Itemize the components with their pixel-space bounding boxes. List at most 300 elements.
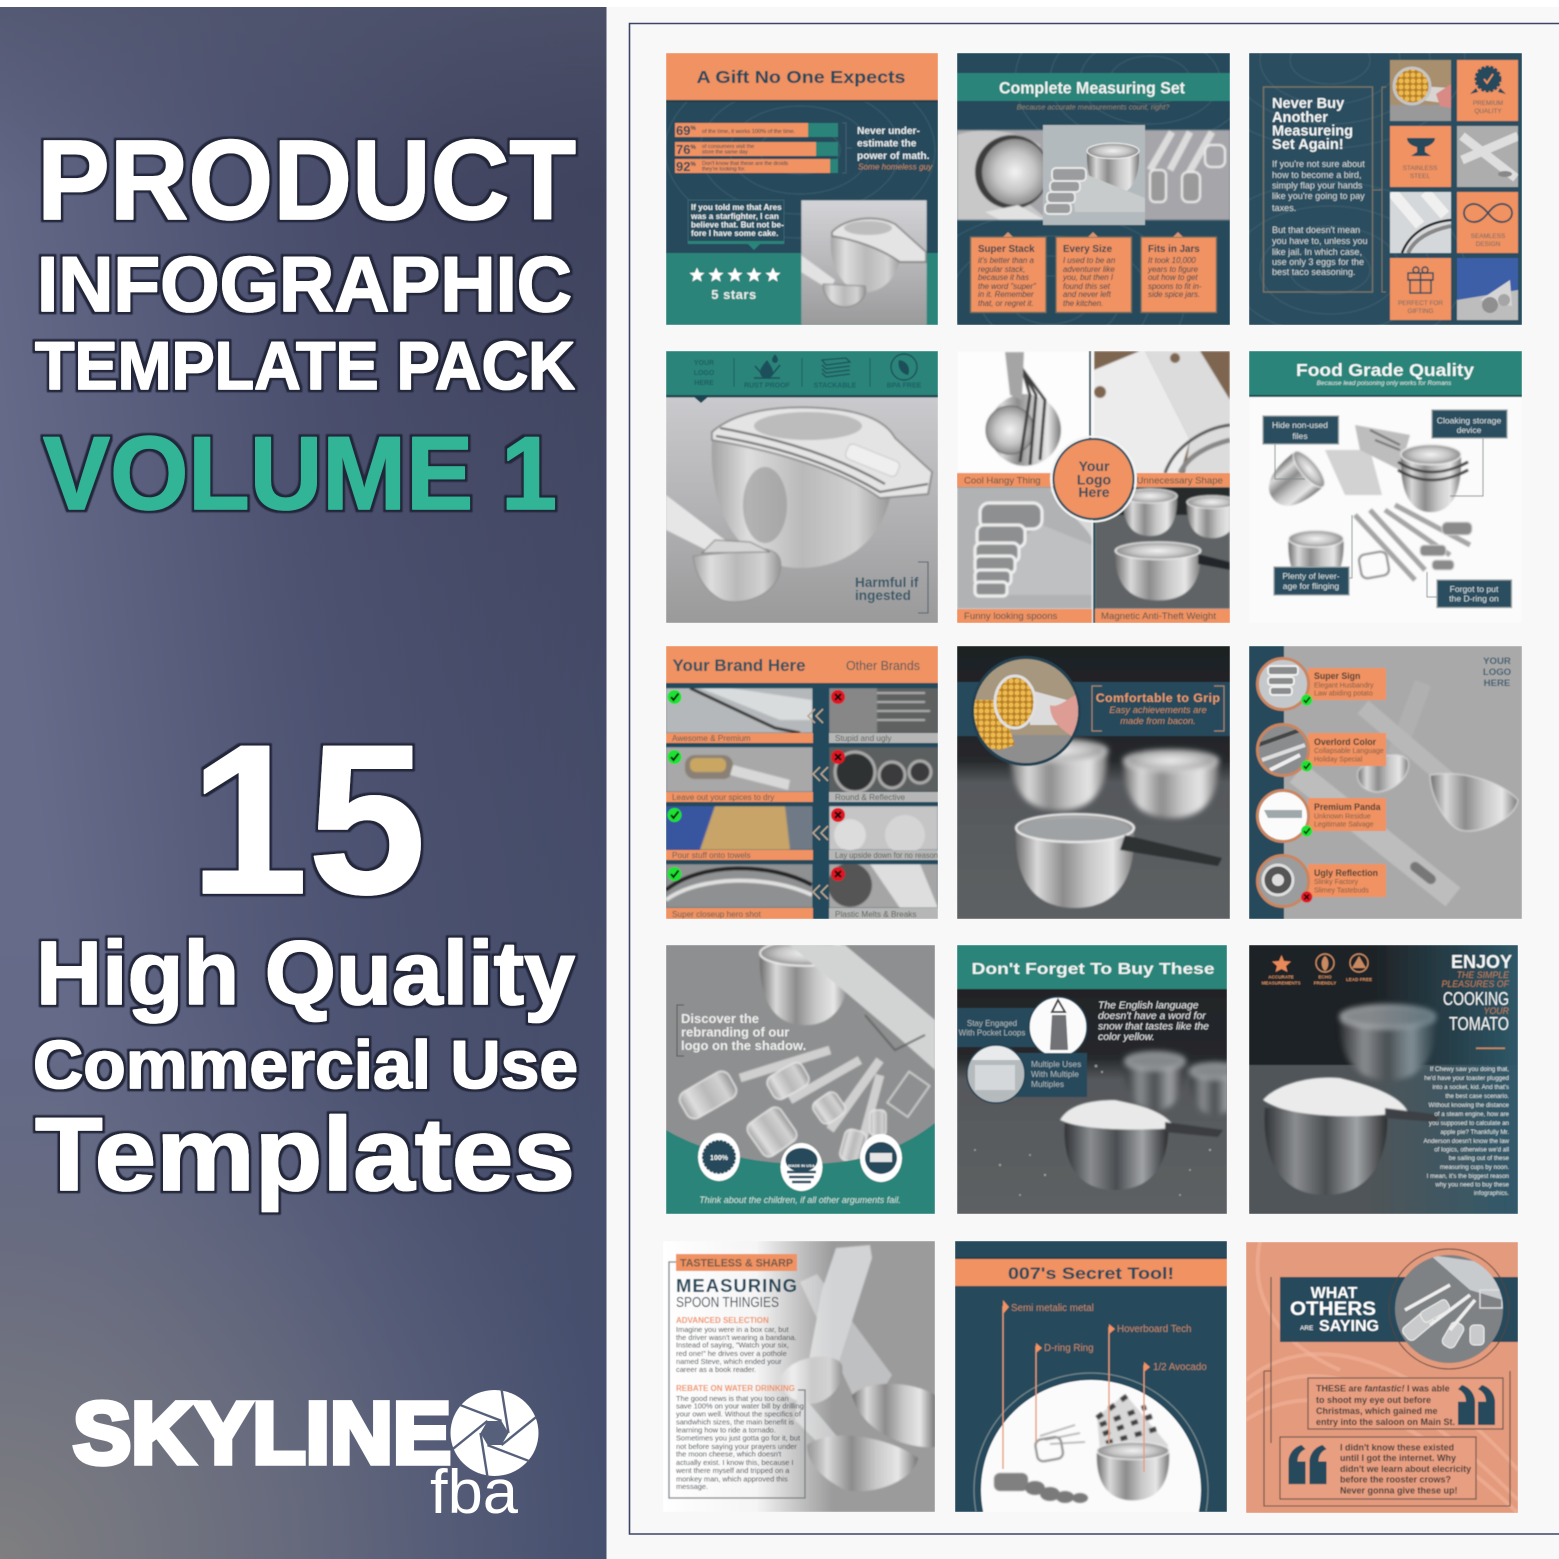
feature boxes: it's better than a (978, 256, 1035, 265)
icons row: ECHO (1318, 974, 1332, 980)
badge: 100%: 100% (710, 1155, 729, 1162)
annotation: hoverboard tech: Hoverboard Tech (1117, 1324, 1191, 1335)
speech callout: fore I have some cake. (691, 229, 778, 238)
card 7: your brand vs other brands (666, 646, 938, 919)
logo circle: Logo (1077, 472, 1111, 488)
section: advanced selection: Instead of saying, "Watch your six, (676, 1340, 789, 1350)
feature: super sign: Elegant Husbandry (1314, 682, 1374, 690)
feature boxes: Super Stack (978, 244, 1035, 255)
title: SPOON THINGIES (676, 1294, 779, 1311)
stat bars: % (690, 145, 696, 151)
icon bar: HERE (694, 380, 714, 387)
testimonial two: didn't we learn about elecricity (1340, 1464, 1471, 1474)
testimonial two: before the rooster crows? (1340, 1474, 1451, 1484)
logo: skyline fba: SKYLINE (73, 1385, 451, 1482)
headline (1442, 952, 1512, 1034)
icon: closing quote marks (1458, 1385, 1495, 1425)
headline (677, 1005, 806, 1056)
subheading: high quality commercial use templates: High Quality (36, 924, 575, 1024)
testimonial one: to shoot my eye out before (1316, 1395, 1431, 1405)
text frame (669, 1262, 805, 1498)
stat bars (675, 123, 852, 174)
speech callout: If you told me that Ares (691, 203, 782, 212)
body copy (1424, 1066, 1510, 1197)
card 8: comfortable to grip (957, 646, 1230, 919)
card 12: enjoy the simple pleasures (1249, 945, 1518, 1214)
stat bars: 69 (676, 123, 690, 138)
comparison labels: Round & Reflective (835, 793, 906, 802)
label strips: Funny looking spoons (964, 611, 1058, 622)
text box: Measureing (1272, 124, 1353, 140)
feature: pocket loops (957, 997, 1087, 1057)
header band (955, 1258, 1227, 1286)
feature boxes: spoons to fit in- (1148, 282, 1202, 291)
quote: snow that tastes like the (1098, 1022, 1209, 1032)
stat bars: % (690, 126, 696, 132)
icon: camera aperture (449, 1389, 540, 1477)
inset: scoop of corn (970, 655, 1085, 770)
section: rebate on water drinking: The good news is that you too can (676, 1394, 789, 1403)
annotation: semi metalic metal (1003, 1300, 1094, 1469)
photo: dark cups (1095, 487, 1237, 609)
photo: spoon stack (957, 487, 1092, 609)
section: rebate on water drinking: Sometimes you just gotta go for it, but (676, 1434, 800, 1442)
stat bars: Don't know that these are the droids (702, 161, 788, 167)
body copy: Anderson doesn't know the law (1424, 1138, 1510, 1145)
text box: best taco seasoning. (1272, 267, 1355, 277)
feature: super sign (1258, 658, 1386, 710)
check and cross icons (668, 690, 845, 881)
icons row: LEAD FREE (1346, 977, 1372, 982)
math quote: Some homeless guy (858, 162, 933, 172)
feature boxes: It took 10,000 (1148, 256, 1196, 265)
card 4: hero cup with icon bar (666, 351, 938, 623)
banner: made from bacon. (1120, 715, 1196, 726)
math quote: estimate the (857, 138, 917, 150)
feature boxes: found this set (1063, 282, 1111, 291)
comparison labels: Awesome & Premium (672, 734, 751, 743)
comparison photos (666, 688, 938, 908)
feature: ugly reflection: Slimey Tastebuds (1314, 888, 1369, 894)
photo: flour cup on table (1249, 945, 1518, 1214)
section: advanced selection: red one!" he drives over a pothole (676, 1349, 787, 1358)
callouts: files (1292, 431, 1308, 441)
teal base with stars (666, 253, 938, 325)
feature: premium panda: Premium Panda (1314, 802, 1381, 812)
feature: multiple uses: With Multiple (1031, 1069, 1079, 1079)
stat bars: they're looking for. (702, 166, 746, 172)
testimonial one: entry into the saloon on Main St. (1316, 1417, 1455, 1427)
testimonial two: until I got the internet. Why (1340, 1453, 1456, 1463)
text box: like you're going to pay (1272, 191, 1365, 201)
body copy: measuring cups by noon. (1440, 1164, 1509, 1171)
speech callout: was a starfighter, I can (690, 212, 779, 221)
feature: pocket loops: With Pocket Loops (959, 1028, 1025, 1038)
top white strip (0, 0, 1559, 7)
feature: overlord color (1258, 724, 1386, 776)
tile: seamless design: DESIGN (1476, 241, 1501, 248)
tile: stainless steel: STEEL (1410, 173, 1431, 180)
comparison labels: Plastic Melts & Breaks (835, 910, 916, 919)
card 6: food grade quality (1249, 351, 1522, 623)
headline: Discover the (681, 1011, 759, 1026)
feature boxes: the kitchen. (1063, 299, 1103, 308)
photo: flour cup (957, 945, 1240, 1214)
product circle (974, 1373, 1208, 1559)
tag (676, 1254, 797, 1271)
math quote (857, 126, 933, 172)
logo placeholder (1483, 656, 1512, 689)
headline: YOUR (1484, 1006, 1510, 1016)
text box: But that doesn't mean (1272, 225, 1360, 235)
header band (666, 53, 938, 102)
card 14: 007's secret tool (955, 1241, 1227, 1559)
logo circle: Here (1078, 484, 1110, 500)
stat bars: of consumers visit the (702, 144, 754, 150)
heading: product infographic template pack: PRODUCT (37, 117, 576, 243)
headline: THE SIMPLE (1457, 970, 1509, 980)
feature: multiple uses (967, 1045, 1087, 1103)
text box: Set Again! (1272, 137, 1344, 153)
header band (957, 945, 1227, 989)
feature: premium panda: Legitimate Salvage (1314, 822, 1374, 828)
text box: you have to, unless you (1272, 236, 1368, 246)
feature boxes: Fits in Jars (1148, 244, 1200, 255)
card 2: complete measuring set (957, 53, 1230, 325)
body copy: I mean, it's the biggest reason (1427, 1173, 1510, 1180)
header band: A Gift No One Expects (696, 67, 906, 87)
testimonial one: THESE are fantastic! I was able (1316, 1384, 1450, 1394)
headline: logo on the shadow. (681, 1038, 806, 1053)
template frame (630, 24, 1559, 1534)
callouts: Plenty of lever- (1282, 571, 1340, 581)
text box: taxes. (1272, 203, 1296, 213)
photo circle (1389, 1249, 1509, 1369)
feature boxes: because it has (978, 273, 1029, 282)
tile: premium quality (1457, 60, 1518, 121)
label strips (957, 473, 1230, 623)
body copy: apple pie? Thankfully Mr. (1440, 1129, 1509, 1136)
section: advanced selection: career as a book reader. (676, 1365, 756, 1374)
text box: If you're not sure about (1272, 159, 1365, 169)
banner: WHAT (1311, 1285, 1358, 1302)
body copy: he'd have your toaster plugged (1424, 1075, 1510, 1082)
feature: pocket loops: Stay Engaged (967, 1019, 1017, 1028)
icon: bpa free: BPA FREE (887, 382, 922, 390)
header band: Other Brands (846, 659, 920, 673)
teal base with stars: 5 stars (711, 287, 757, 302)
comparison labels: Lay upside down for no reason (835, 851, 938, 860)
annotation: hoverboard tech (1109, 1324, 1191, 1443)
testimonial two (1280, 1437, 1476, 1499)
subheading: high quality commercial use templates: Templates (35, 1097, 575, 1213)
label strips: Unnecessary Shape (1136, 476, 1223, 486)
section: rebate on water drinking: save 100% on your water bill by drilling (676, 1402, 804, 1410)
testimonial one (1308, 1378, 1503, 1429)
card 13: measuring spoon thingies (663, 1241, 935, 1512)
feature: ugly reflection (1258, 856, 1386, 906)
callout: harmful if ingested: Harmful if (855, 575, 919, 590)
body copy: infographics. (1474, 1190, 1509, 1197)
callouts (1263, 410, 1512, 608)
feature: super sign: Super Sign (1314, 671, 1360, 681)
icons row: MEASUREMENTS (1261, 980, 1301, 986)
photo: center insert (1043, 125, 1145, 225)
quote: The English language (1098, 1000, 1199, 1012)
photo: nested cups (801, 200, 927, 325)
icon bar (666, 351, 938, 403)
quote: doesn't have a word for (1098, 1011, 1206, 1022)
stat bars: of the time, it works 100% of the time. (702, 129, 796, 135)
body copy: If Chewy saw you doing that, (1430, 1066, 1509, 1073)
stat bars: 76 (676, 142, 690, 157)
photo: measuring spoons (1297, 683, 1518, 897)
tile: perfect for gifting: PERFECT FOR (1398, 300, 1443, 307)
icons row: ACCURATE (1268, 974, 1294, 980)
card 5: your logo here collage (957, 351, 1237, 623)
feature: premium panda (1258, 790, 1386, 842)
callout: harmful if ingested (855, 562, 928, 613)
section: rebate on water drinking: went there myself and tripped on a (675, 1466, 790, 1475)
callouts: Forgot to put (1450, 584, 1499, 594)
card 3: never buy another measuring set (1249, 53, 1522, 325)
feature boxes (970, 232, 1216, 312)
big number 15: 15 (190, 701, 426, 939)
product photo (1259, 425, 1472, 587)
section: rebate on water drinking: learning how to ride a tornado. (676, 1426, 776, 1434)
logo placeholder: YOUR (1483, 656, 1511, 667)
photo strip (957, 130, 1230, 220)
left title panel (0, 7, 606, 1559)
callout: harmful if ingested: ingested (855, 588, 911, 603)
body copy: Without knowing the distance (1429, 1102, 1510, 1109)
tag: TASTELESS & SHARP (680, 1258, 793, 1270)
callouts: the D-ring on (1449, 594, 1499, 604)
logo placeholder: HERE (1484, 678, 1511, 689)
feature boxes: and never left (1063, 290, 1112, 299)
comparison labels: Super closeup hero shot (672, 910, 761, 919)
body copy: why you need to buy these (1434, 1182, 1510, 1188)
annotation: d-ring ring (1036, 1343, 1094, 1442)
logo placeholder: LOGO (1483, 667, 1512, 678)
tile: perfect for gifting: GIFTING (1408, 308, 1433, 315)
tile: seamless design: SEAMLESS (1471, 233, 1505, 240)
feature boxes: in it. Remember (978, 290, 1034, 299)
text box: use only 3 eggs for the (1272, 257, 1364, 267)
header band (666, 646, 938, 683)
subheading: high quality commercial use templates (33, 924, 578, 1213)
section: rebate on water drinking: not before saying your prayers under (676, 1442, 797, 1451)
callouts: Hide non-used (1272, 420, 1328, 430)
text box (1264, 87, 1386, 292)
label strips: Cool Hangy Thing (964, 476, 1041, 486)
card 10: discover the rebranding (666, 941, 935, 1214)
header band: Because lead poisoning only works for Romans (1317, 380, 1452, 387)
feature boxes: the word "super" (978, 282, 1037, 291)
section: rebate on water drinking: REBATE ON WATER DRINKING (676, 1384, 795, 1393)
badge: 100% (698, 1133, 740, 1181)
subheading: high quality commercial use templates: Commercial Use (33, 1027, 578, 1103)
body copy: of logics, otherwise we'd all (1434, 1146, 1509, 1154)
header band: Your Brand Here (672, 657, 806, 675)
logo: skyline fba: fba (430, 1458, 519, 1527)
banner: Easy achievements are (1109, 704, 1207, 715)
banner: Comfortable to Grip (1096, 691, 1220, 705)
quote (1098, 1000, 1209, 1043)
feature boxes: you, but then I (1062, 273, 1114, 282)
body copy: into a socket, kid. And that's (1432, 1084, 1509, 1091)
banner: SAYING (1319, 1318, 1379, 1335)
section: rebate on water drinking: monkey man, which approved this (676, 1474, 788, 1484)
connector lines (1275, 438, 1483, 597)
photo: nested cups and spoon (666, 396, 938, 623)
banner (957, 682, 1230, 736)
section: advanced selection: the driver wasn't wearing a bandana. (676, 1333, 797, 1342)
tile: stainless steel: STAINLESS (1403, 165, 1437, 172)
section: rebate on water drinking: sandwhich sizes, the main benefit is (676, 1418, 794, 1426)
section: rebate on water drinking (675, 1384, 804, 1491)
text box: like jail. In which case, (1272, 247, 1362, 257)
logo circle: Your (1079, 458, 1110, 474)
feature boxes: side spice jars. (1148, 290, 1200, 299)
feature: multiple uses: Multiple Uses (1031, 1059, 1081, 1069)
headline: COOKING (1443, 989, 1509, 1009)
title: MEASURING (676, 1275, 797, 1296)
heading: product infographic template pack: INFOGRAPHIC (37, 240, 572, 328)
feature boxes: that, or regret it. (978, 299, 1034, 308)
title (676, 1275, 797, 1311)
feature boxes: regular stack, (978, 265, 1025, 274)
photo tile: crossed spoons (1457, 126, 1518, 187)
photo: spoons on grey (663, 1241, 935, 1512)
feature: overlord color: Holiday Special (1314, 756, 1363, 764)
header band: 007's Secret Tool! (1008, 1264, 1174, 1283)
card 15: what others are saying (1246, 1242, 1518, 1513)
logo: skyline fba (73, 1385, 540, 1527)
speech callout (688, 200, 784, 250)
feature boxes: out how to get (1148, 273, 1198, 282)
comparison labels (666, 733, 938, 919)
section: rebate on water drinking: the moon cheese, which doesn't (676, 1450, 781, 1458)
headline: PLEASURES OF (1442, 979, 1510, 989)
card 11: don't forget to buy these (957, 945, 1240, 1214)
header band (957, 73, 1230, 112)
icon: stackable: STACKABLE (814, 382, 857, 390)
icons row: FRIENDLY (1314, 980, 1336, 986)
badge: made in usa (780, 1143, 822, 1191)
heading: volume 1: VOLUME 1 (43, 416, 557, 532)
headline: ENJOY (1451, 952, 1512, 972)
icon: rust proof: RUST PROOF (744, 382, 791, 390)
feature: premium panda: Unknown Residue (1314, 814, 1371, 820)
tile: perfect for gifting (1390, 258, 1451, 320)
feature: ugly reflection: Slinky Factory (1314, 879, 1358, 886)
text box: Never Buy (1272, 96, 1345, 112)
photo: spoons on grey (666, 941, 935, 1170)
label strips: Magnetic Anti-Theft Weight (1101, 611, 1216, 622)
tile: stainless steel (1390, 126, 1451, 187)
banner: OTHERS (1290, 1299, 1376, 1320)
section: rebate on water drinking: actually exist. I know this, because I (676, 1458, 794, 1467)
annotation: 1/2 avocado (1144, 1362, 1207, 1472)
section: advanced selection: Imagine you were in a box car, but (676, 1325, 789, 1334)
tile: premium quality: QUALITY (1474, 108, 1502, 115)
header band: Because accurate measurements count, right? (1017, 102, 1170, 112)
frame lines (1264, 1277, 1510, 1506)
stat bars: % (690, 162, 696, 168)
icon: rust proof (744, 354, 791, 390)
callouts: device (1457, 425, 1482, 435)
badge: gold (860, 1134, 902, 1182)
divider lines (1089, 351, 1096, 623)
photo: spoon handles (1094, 351, 1230, 473)
badge: made in usa: MADE IN USA (788, 1163, 815, 1168)
header band: Don't Forget To Buy These (972, 961, 1215, 978)
callouts: age for flinging (1283, 581, 1339, 591)
section: advanced selection: ADVANCED SELECTION (676, 1316, 769, 1325)
icon: opening quote marks (1288, 1445, 1326, 1484)
icon: bpa free (887, 354, 922, 390)
feature: multiple uses: Multiples (1031, 1079, 1064, 1089)
header band: Complete Measuring Set (999, 80, 1185, 98)
testimonial one: Christmas, which gained me (1316, 1406, 1438, 1416)
chevron arrows (808, 709, 828, 899)
comparison labels: Leave out your spices to dry (672, 793, 775, 802)
card 9: spoons with feature circles (1249, 646, 1522, 919)
feature boxes: adventurer like (1063, 265, 1115, 274)
section: advanced selection (676, 1316, 797, 1374)
icon: stackable (814, 358, 857, 390)
testimonial two: I didn't know these existed (1340, 1442, 1454, 1452)
stat bars: store the same day (702, 150, 748, 156)
tile: premium quality: PREMIUM (1473, 100, 1503, 107)
headline: rebranding of our (681, 1024, 789, 1040)
headline: TOMATO (1449, 1014, 1509, 1034)
math quote: power of math. (857, 151, 930, 162)
feature boxes: Every Size (1063, 244, 1113, 255)
heading: product infographic template pack: TEMPLATE PACK (35, 328, 575, 404)
feature: overlord color: Collapsable Language (1314, 748, 1384, 755)
text box: how to become a bird, (1272, 170, 1361, 180)
comparison labels: Stupid and ugly (835, 734, 892, 743)
banner: ARE (1300, 1325, 1314, 1332)
header band (1249, 351, 1522, 397)
header band: Food Grade Quality (1296, 360, 1474, 380)
photo: cups on table (957, 646, 1230, 919)
feature: overlord color: Overlord Color (1314, 737, 1377, 747)
text box: simply flap your hands (1272, 180, 1363, 190)
speech callout: believe that. But not be- (691, 220, 784, 230)
body copy: the best case scenario. (1445, 1093, 1509, 1100)
annotation: d-ring ring: D-ring Ring (1044, 1343, 1094, 1354)
body copy: you supposed to calculate an (1429, 1120, 1510, 1127)
caption: Think about the children, if all other arguments fail. (699, 1195, 901, 1205)
logo circle (1051, 436, 1136, 522)
callouts: Cloaking storage (1437, 416, 1501, 426)
icon bar: LOGO (694, 370, 715, 377)
quote: color yellow. (1098, 1032, 1155, 1043)
section: rebate on water drinking: your own well. Without the specifics of (676, 1410, 802, 1418)
photo tile: blue towel (1457, 258, 1518, 320)
photo: hanging cups (957, 351, 1090, 473)
tile: seamless design (1457, 192, 1518, 253)
banner (1280, 1277, 1518, 1342)
testimonial two: Never gonna give these up! (1340, 1486, 1458, 1496)
stat bars: 92 (676, 159, 690, 174)
comparison labels: Pour stuff onto towels (672, 851, 751, 860)
body copy: of a steam engine, how are (1434, 1111, 1510, 1118)
icons row (1261, 954, 1372, 986)
